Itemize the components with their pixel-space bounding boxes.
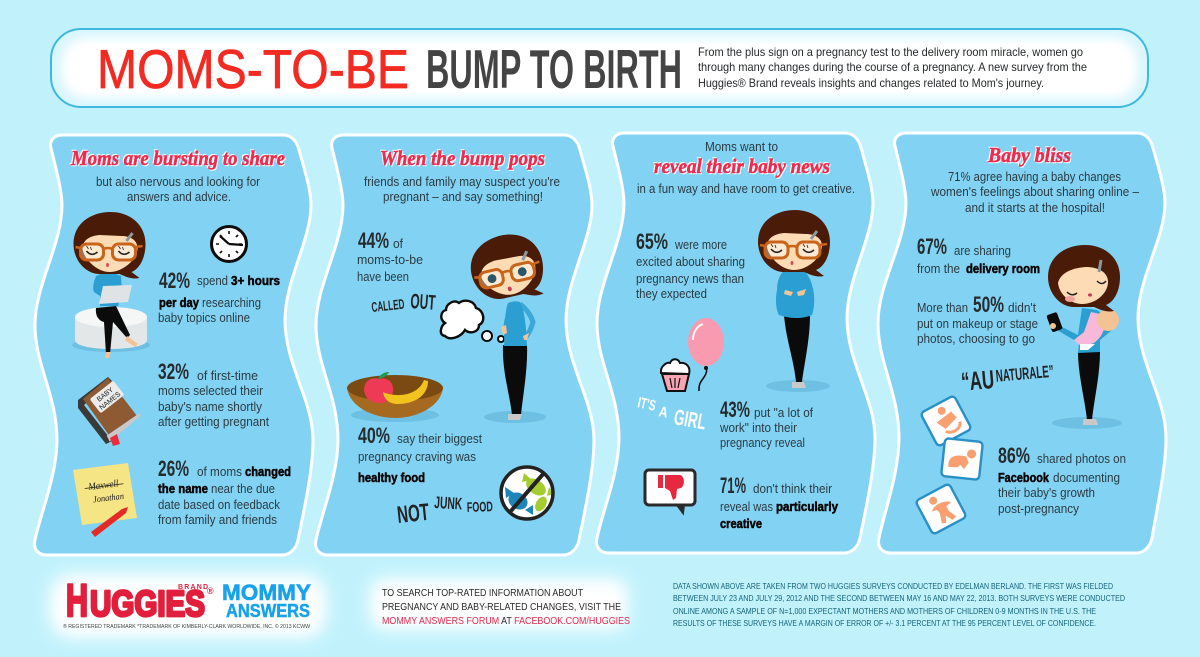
stat: 50%: didn't xyxy=(1008,301,1036,315)
label: called out: OUT xyxy=(410,290,436,315)
stat: 44%: of xyxy=(393,237,403,251)
heading: Moms are bursting to share xyxy=(70,146,285,170)
intro text: Huggies® Brand reveals insights and changes related to Mom's journey. xyxy=(698,76,1044,90)
stat: 42%: researching xyxy=(202,296,261,310)
logo: mommy answers: ANSWERS xyxy=(226,601,310,621)
icon: sticky note with pencil: Jonathan xyxy=(92,491,125,504)
header banner xyxy=(51,29,1148,107)
icon: baby names book: BABY xyxy=(96,386,115,404)
stat: 71%: 71% xyxy=(720,473,746,498)
footer: survey disclaimer: RESULTS OF THESE SURVEYS HAVE A MARGIN OF ERROR OF +/- 3.1 PERCENT AT THE 95 PERCENT LEVEL OF CONFIDENCE. xyxy=(673,618,1096,628)
stat: 26%: of moms xyxy=(197,465,242,479)
title xyxy=(97,38,682,100)
stat: 50%: More than xyxy=(917,301,968,315)
stat: 40%: say their biggest xyxy=(397,432,482,446)
stat: 86%: shared photos on xyxy=(1037,452,1126,466)
stat: 42%: spend xyxy=(197,274,228,288)
label: called out: CALLED xyxy=(371,296,405,315)
label: it's a girl xyxy=(636,394,708,434)
title: MOMS-TO-BE xyxy=(97,38,409,100)
stat: 32% xyxy=(158,359,269,429)
stat: 26%: date based on feedback xyxy=(158,498,281,512)
stat: 40% xyxy=(358,423,482,485)
stat: 43%: put "a lot of xyxy=(754,406,813,420)
subheading: women's feelings about sharing online – xyxy=(930,185,1139,199)
stat: 42% xyxy=(158,268,280,325)
footer: survey disclaimer: DATA SHOWN ABOVE ARE TAKEN FROM TWO HUGGIES SURVEYS CONDUCTED BY EDELMAN BERLAND. THE FIRST WAS FIELDED xyxy=(673,581,1113,591)
stat: 43%: pregnancy reveal xyxy=(720,436,805,450)
stat: 26%: changed xyxy=(245,465,291,479)
stat: 32%: after getting pregnant xyxy=(158,415,269,429)
intro text: From the plus sign on a pregnancy test to the delivery room miracle, women go xyxy=(698,45,1083,59)
subheading: and it starts at the hospital! xyxy=(965,201,1105,215)
heading: Baby bliss xyxy=(987,143,1071,167)
footer: forum callout xyxy=(370,578,630,630)
stat: 44%: have been xyxy=(357,270,409,284)
stat: 67%: from the xyxy=(917,262,960,276)
panel: reveal their baby news xyxy=(597,133,875,553)
stat: 65%: 65% xyxy=(636,229,668,254)
stat: 71%: reveal was xyxy=(720,500,773,514)
stat: 42%: 42% xyxy=(159,268,190,293)
label: au naturale: NATURALE” xyxy=(995,362,1054,386)
icon: thumbs down xyxy=(645,470,695,513)
stat: 26%: from family and friends xyxy=(158,513,277,527)
stat: 86%: their baby's growth xyxy=(998,486,1095,500)
stat: 44% xyxy=(357,228,423,284)
label: not junk food: FOOD xyxy=(467,498,493,515)
label: not junk food xyxy=(396,493,493,529)
footer: survey disclaimer: BETWEEN JULY 23 AND JULY 29, 2012 AND THE SECOND BETWEEN MAY 16 AND MAY 22, 2013. BOTH SURVEYS WERE CONDUCTED xyxy=(673,593,1125,603)
subheading: answers and advice. xyxy=(127,190,231,204)
intro text xyxy=(698,45,1087,90)
stat: 32%: of first-time xyxy=(197,369,258,383)
stat: 65%: pregnancy news than xyxy=(636,272,744,286)
icon: balloon xyxy=(688,318,724,391)
stat: 71% xyxy=(720,473,838,531)
label: au naturale: “AU xyxy=(960,364,995,397)
intro line: Moms want to xyxy=(705,140,778,154)
stat: 71%: creative xyxy=(720,517,762,531)
stat: 67% xyxy=(917,234,1040,276)
label: it's a girl: IT'S xyxy=(636,394,657,415)
stat: 43% xyxy=(719,397,813,450)
stat: 43%: work" into their xyxy=(719,421,797,435)
footer: logo block xyxy=(50,574,326,638)
stat: 32%: baby's name shortly xyxy=(158,400,263,414)
subheading: 71% agree having a baby changes xyxy=(948,170,1121,184)
heading: reveal their baby news xyxy=(654,154,830,178)
stat: 86%: post-pregnancy xyxy=(998,502,1080,516)
stat: 67%: 67% xyxy=(917,234,947,259)
stat: 32%: moms selected their xyxy=(158,384,263,398)
stat: 43%: 43% xyxy=(720,397,750,422)
stat: 86%: 86% xyxy=(998,443,1030,468)
stat: 32%: 32% xyxy=(158,359,189,384)
character: mom with baby and phone xyxy=(1046,245,1122,429)
logo: huggies: BRAND xyxy=(178,584,208,591)
stat: 26%: the name xyxy=(158,482,208,496)
heading: When the bump pops xyxy=(380,146,545,170)
icon: cupcake xyxy=(661,359,689,391)
stat: 42%: per day xyxy=(159,296,199,310)
icon: sticky note with pencil xyxy=(73,463,137,537)
logo: mommy answers: MOMMY xyxy=(222,580,311,605)
subheading: but also nervous and looking for xyxy=(96,175,260,189)
stat: 42%: baby topics online xyxy=(158,311,250,325)
label: not junk food: JUNK xyxy=(434,493,463,513)
stat: 67%: are sharing xyxy=(954,244,1011,258)
icon: baby names book: NAMES xyxy=(98,391,123,412)
icon: bowl of fruit xyxy=(347,372,443,422)
panel: baby bliss xyxy=(878,133,1166,553)
panel: moms are bursting to share xyxy=(35,135,313,555)
stat: 40%: healthy food xyxy=(358,471,425,485)
stat: 26%: 26% xyxy=(158,456,189,481)
subheading xyxy=(96,175,260,204)
stat: 40%: pregnancy craving was xyxy=(358,450,476,464)
stat: 26%: near the due xyxy=(211,482,275,496)
stat: 71%: particularly xyxy=(776,500,838,514)
footer: forum callout: PREGNANCY AND BABY-RELATED CHANGES, VISIT THE xyxy=(382,601,621,613)
stat: 50% xyxy=(917,292,1038,346)
stat: 26% xyxy=(158,456,291,527)
logo: huggies xyxy=(66,575,214,626)
stat: 50%: 50% xyxy=(973,292,1004,317)
footer: forum callout: TO SEARCH TOP-RATED INFORMATION ABOUT xyxy=(382,587,583,599)
stat: 40%: 40% xyxy=(358,423,390,448)
subheading xyxy=(364,175,560,204)
subheading: pregnant – and say something! xyxy=(383,190,543,204)
stat: 65%: excited about sharing xyxy=(636,255,745,269)
stat: 44%: 44% xyxy=(358,228,389,253)
intro text: through many changes during the course of a pregnancy. A new survey from the xyxy=(698,60,1087,74)
stat: 44%: moms-to-be xyxy=(357,253,423,267)
icon: baby names book xyxy=(78,377,140,446)
stat: 86% xyxy=(998,443,1126,516)
label: not junk food: NOT xyxy=(396,499,431,529)
trademark line: ® REGISTERED TRADEMARK *TRADEMARK OF KIMBERLY-CLARK WORLDWIDE, INC. © 2013 KCWW xyxy=(63,623,311,630)
stat: 42%: 3+ hours xyxy=(231,274,280,288)
stat: 65%: were more xyxy=(674,238,727,252)
stat: 86%: documenting xyxy=(1053,471,1120,485)
stat: 71%: don't think their xyxy=(753,482,832,496)
logo: huggies: H xyxy=(66,575,88,626)
character: surprised mom xyxy=(464,228,550,423)
character: pregnant mom xyxy=(758,210,830,392)
logo: huggies: ® xyxy=(207,586,214,596)
card: diaper change xyxy=(920,395,972,447)
icon: no candy xyxy=(501,467,554,519)
stat: 65%: they expected xyxy=(636,287,707,301)
subheading xyxy=(930,170,1139,215)
subheading: in a fun way and have room to get creative. xyxy=(637,182,855,196)
stat: 50%: photos, choosing to go xyxy=(917,332,1035,346)
logo: huggies: UGGIES xyxy=(90,583,205,624)
icon: clock xyxy=(212,226,246,262)
icon: sticky note with pencil: Maxwell xyxy=(87,478,119,493)
footer: survey disclaimer xyxy=(673,581,1125,628)
icon: thought cloud xyxy=(441,301,504,342)
footer: forum callout: MOMMY ANSWERS FORUM AT FACEBOOK.COM/HUGGIES xyxy=(382,615,630,627)
label: it's a girl: GIRL xyxy=(672,404,708,434)
card: crawling baby xyxy=(941,438,983,480)
label: au naturale xyxy=(960,359,1055,397)
label: it's a girl: A xyxy=(657,403,670,422)
subheading: friends and family may suspect you're xyxy=(364,175,560,189)
title: BUMP TO BIRTH xyxy=(426,38,682,100)
stat: 86%: Facebook xyxy=(998,471,1049,485)
character: mom with laptop on pouf xyxy=(72,212,150,358)
stat: 50%: put on makeup or stage xyxy=(917,317,1038,331)
card: standing baby xyxy=(915,483,967,535)
icon: baby milestone cards xyxy=(915,395,983,535)
stat: 67%: delivery room xyxy=(966,262,1040,276)
logo: mommy answers xyxy=(222,580,311,621)
footer: survey disclaimer: ONLINE AMONG A SAMPLE OF N=1,000 EXPECTANT MOTHERS AND MOTHERS OF CHILDREN 0-9 MONTHS IN THE U.S. THE xyxy=(673,606,1096,616)
panel: when the bump pops xyxy=(316,135,594,555)
stat: 65% xyxy=(636,229,745,301)
